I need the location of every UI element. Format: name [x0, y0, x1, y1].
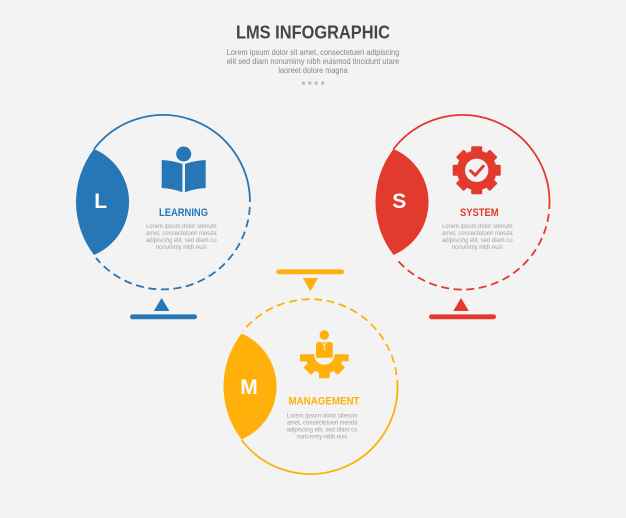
circle outline: learning: [94, 115, 250, 289]
pagination dots: [302, 82, 324, 85]
text block: system: [442, 223, 513, 251]
icon: book reader: [162, 146, 206, 192]
badge letter L: L: [94, 190, 107, 213]
text block: system: Lorem ipsum dolor siterum: [442, 223, 513, 230]
lens badge: S: [375, 149, 429, 255]
text block: learning: Lorem ipsum dolor siterum: [146, 223, 217, 230]
text block: learning: amet, consectetueri mesda: [146, 230, 217, 237]
text block: system: amet, consectetueri mesda: [442, 230, 513, 237]
circle outline: system: [394, 115, 549, 290]
panel: management: [223, 269, 397, 474]
text block: learning: [146, 223, 217, 251]
pointer: learning: [130, 298, 197, 319]
circle outline: management: [242, 299, 397, 474]
badge letter S: S: [392, 190, 406, 213]
subtitle text: [227, 48, 400, 75]
text block: management: nonummy nibh euis: [296, 433, 348, 440]
lens badge: L: [76, 149, 129, 255]
panel: system: [375, 115, 549, 319]
heading: management: MANAGEMENT: [288, 396, 360, 408]
text block: learning: adipiscing elit, sed diam co: [146, 237, 217, 244]
icon: manager on gear: [300, 330, 349, 378]
panel: learning: [76, 115, 250, 319]
text block: management: adipiscing elit, sed diam co: [287, 426, 358, 433]
text block: management: amet, consectetueri mesda: [287, 419, 358, 426]
text block: learning: nonummy nibh euis: [156, 244, 207, 251]
subtitle text: Lorem ipsum dolor sit amet, consectetueri adipiscing: [227, 48, 399, 57]
title: LMS INFOGRAPHIC: [236, 22, 390, 42]
heading: system: SYSTEM: [460, 207, 499, 219]
pointer: system: [429, 298, 496, 319]
heading: learning: LEARNING: [159, 207, 208, 219]
header: [227, 22, 400, 85]
badge letter M: M: [240, 376, 258, 399]
lens badge: M: [223, 334, 277, 440]
pointer: management: [276, 269, 344, 291]
text block: management: [287, 412, 358, 440]
subtitle text: elit sed diam nonumimy nibh euismod tincidunt utare: [227, 57, 400, 66]
icon: gear with check: [453, 146, 501, 194]
text block: system: nonummy nibh euis: [452, 244, 503, 251]
text block: management: Lorem ipsum dolor siterum: [287, 412, 358, 419]
text block: system: adipiscing elit, sed diam co: [442, 237, 513, 244]
subtitle text: laoreet dolore magna: [278, 66, 348, 75]
